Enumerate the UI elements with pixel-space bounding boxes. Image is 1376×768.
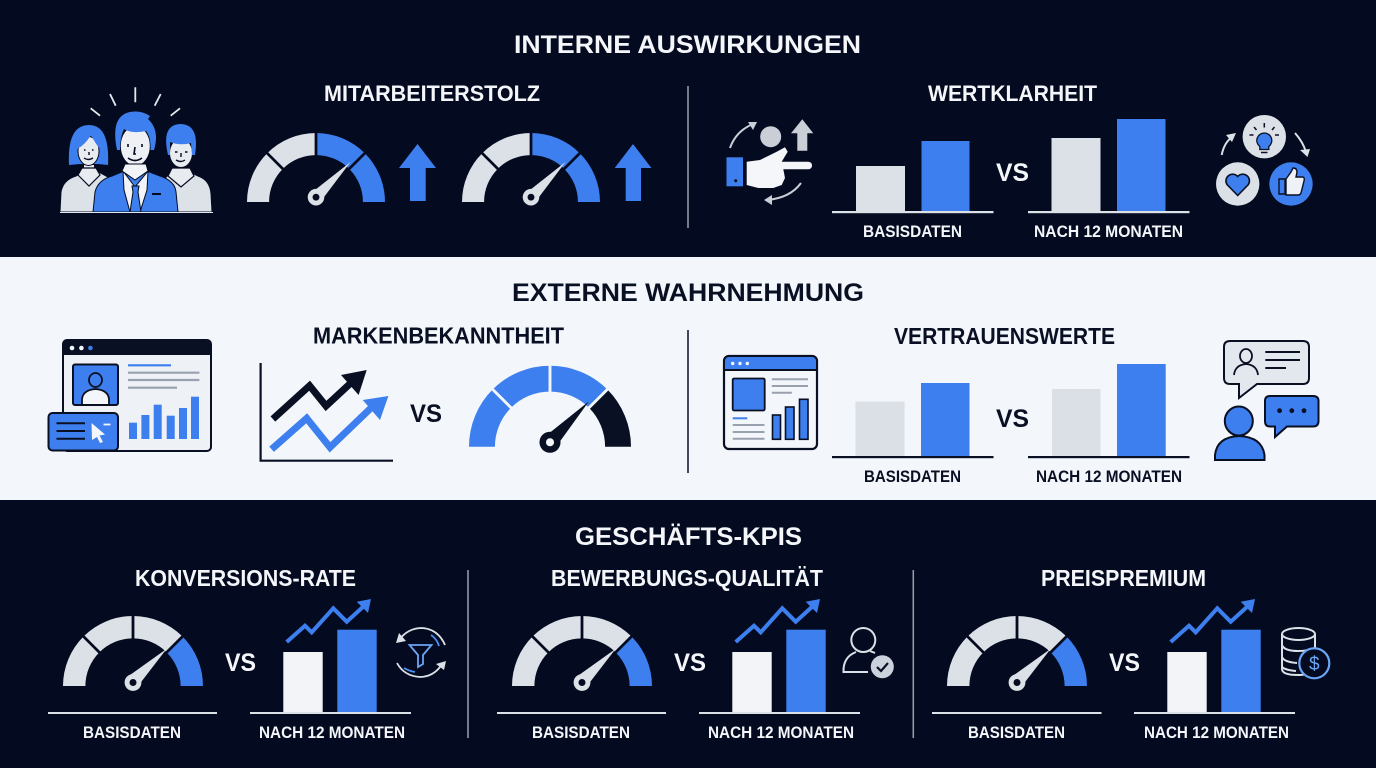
heading: vertrauenswerte: VERTRAUENSWERTE xyxy=(894,323,1115,349)
gauge: markenbekanntheit xyxy=(482,362,618,453)
chart: rising lines xyxy=(261,363,393,461)
icon: person with speech bubbles xyxy=(1215,341,1318,460)
heading: markenbekanntheit: MARKENBEKANNTHEIT xyxy=(313,322,564,348)
label: vs: VS xyxy=(225,649,256,677)
gauge: konversions-rate xyxy=(74,613,192,691)
label: nach 12 monaten: NACH 12 MONATEN xyxy=(1144,724,1289,742)
label: vs: VS xyxy=(674,649,706,677)
panel: mitarbeiterstolz heading: MITARBEITERSTOLZ xyxy=(324,81,540,106)
label: vs: VS xyxy=(410,400,442,428)
label: vs: VS xyxy=(996,159,1029,187)
chart: wertklarheit basisdaten bars xyxy=(832,141,994,241)
label: vs: VS xyxy=(996,405,1029,433)
label: basisdaten: BASISDATEN xyxy=(532,724,630,742)
chart: bars with trend xyxy=(1134,599,1295,714)
icon: funnel cycle xyxy=(396,628,446,677)
text: dollar sign: $ xyxy=(1309,654,1320,675)
label: nach 12 monaten: NACH 12 MONATEN xyxy=(259,724,405,742)
heading: interne auswirkungen: INTERNE AUSWIRKUNGEN xyxy=(514,31,861,59)
chart: vertrauenswerte nach 12 monaten bars xyxy=(1028,364,1190,486)
icon: idea heart like cycle xyxy=(1216,115,1313,206)
label: basisdaten: BASISDATEN xyxy=(863,223,962,241)
gauge: mitarbeiterstolz first xyxy=(258,130,374,205)
gauge: mitarbeiterstolz second xyxy=(473,130,589,205)
column: preispremium xyxy=(932,565,1329,742)
icon: review page xyxy=(724,356,817,449)
column: konversions-rate xyxy=(48,565,446,742)
label: basisdaten: BASISDATEN xyxy=(83,724,181,742)
column: bewerbungs-qualität xyxy=(497,565,894,742)
heading: preispremium: PREISPREMIUM xyxy=(1041,565,1206,591)
chart: bars with trend xyxy=(699,599,860,714)
label: basisdaten: BASISDATEN xyxy=(968,724,1065,742)
arrow: up first xyxy=(399,144,436,201)
icon: pointing hand xyxy=(726,119,813,205)
label: nach 12 monaten: NACH 12 MONATEN xyxy=(708,724,854,742)
arrow: up second xyxy=(615,144,651,201)
chart: vertrauenswerte basisdaten bars xyxy=(832,383,994,486)
chart: bars with trend xyxy=(250,599,411,714)
panel: externe wahrnehmung xyxy=(0,257,1376,500)
label: vs: VS xyxy=(1109,649,1140,677)
icon: brand website xyxy=(48,340,211,451)
gauge: bewerbungs-qualität xyxy=(523,613,641,691)
chart: wertklarheit nach 12 monaten bars xyxy=(1028,119,1190,241)
heading: bewerbungs-qualität: BEWERBUNGS-QUALITÄT xyxy=(551,565,823,591)
icon: coins with dollar xyxy=(1282,628,1329,678)
gauge: preispremium xyxy=(958,613,1076,691)
heading: geschäfts-kpis: GESCHÄFTS-KPIS xyxy=(575,523,802,551)
panel: interne auswirkungen xyxy=(0,0,1376,257)
heading: konversions-rate: KONVERSIONS-RATE xyxy=(135,565,356,591)
icon: proud team xyxy=(60,87,213,212)
label: nach 12 monaten: NACH 12 MONATEN xyxy=(1034,223,1183,241)
panel: geschäfts-kpis xyxy=(0,500,1376,768)
heading: wertklarheit: WERTKLARHEIT xyxy=(928,81,1098,106)
icon: user with check xyxy=(843,628,894,678)
label: basisdaten: BASISDATEN xyxy=(864,468,961,486)
heading: externe wahrnehmung: EXTERNE WAHRNEHMUNG xyxy=(512,279,864,307)
label: nach 12 monaten: NACH 12 MONATEN xyxy=(1036,468,1182,486)
